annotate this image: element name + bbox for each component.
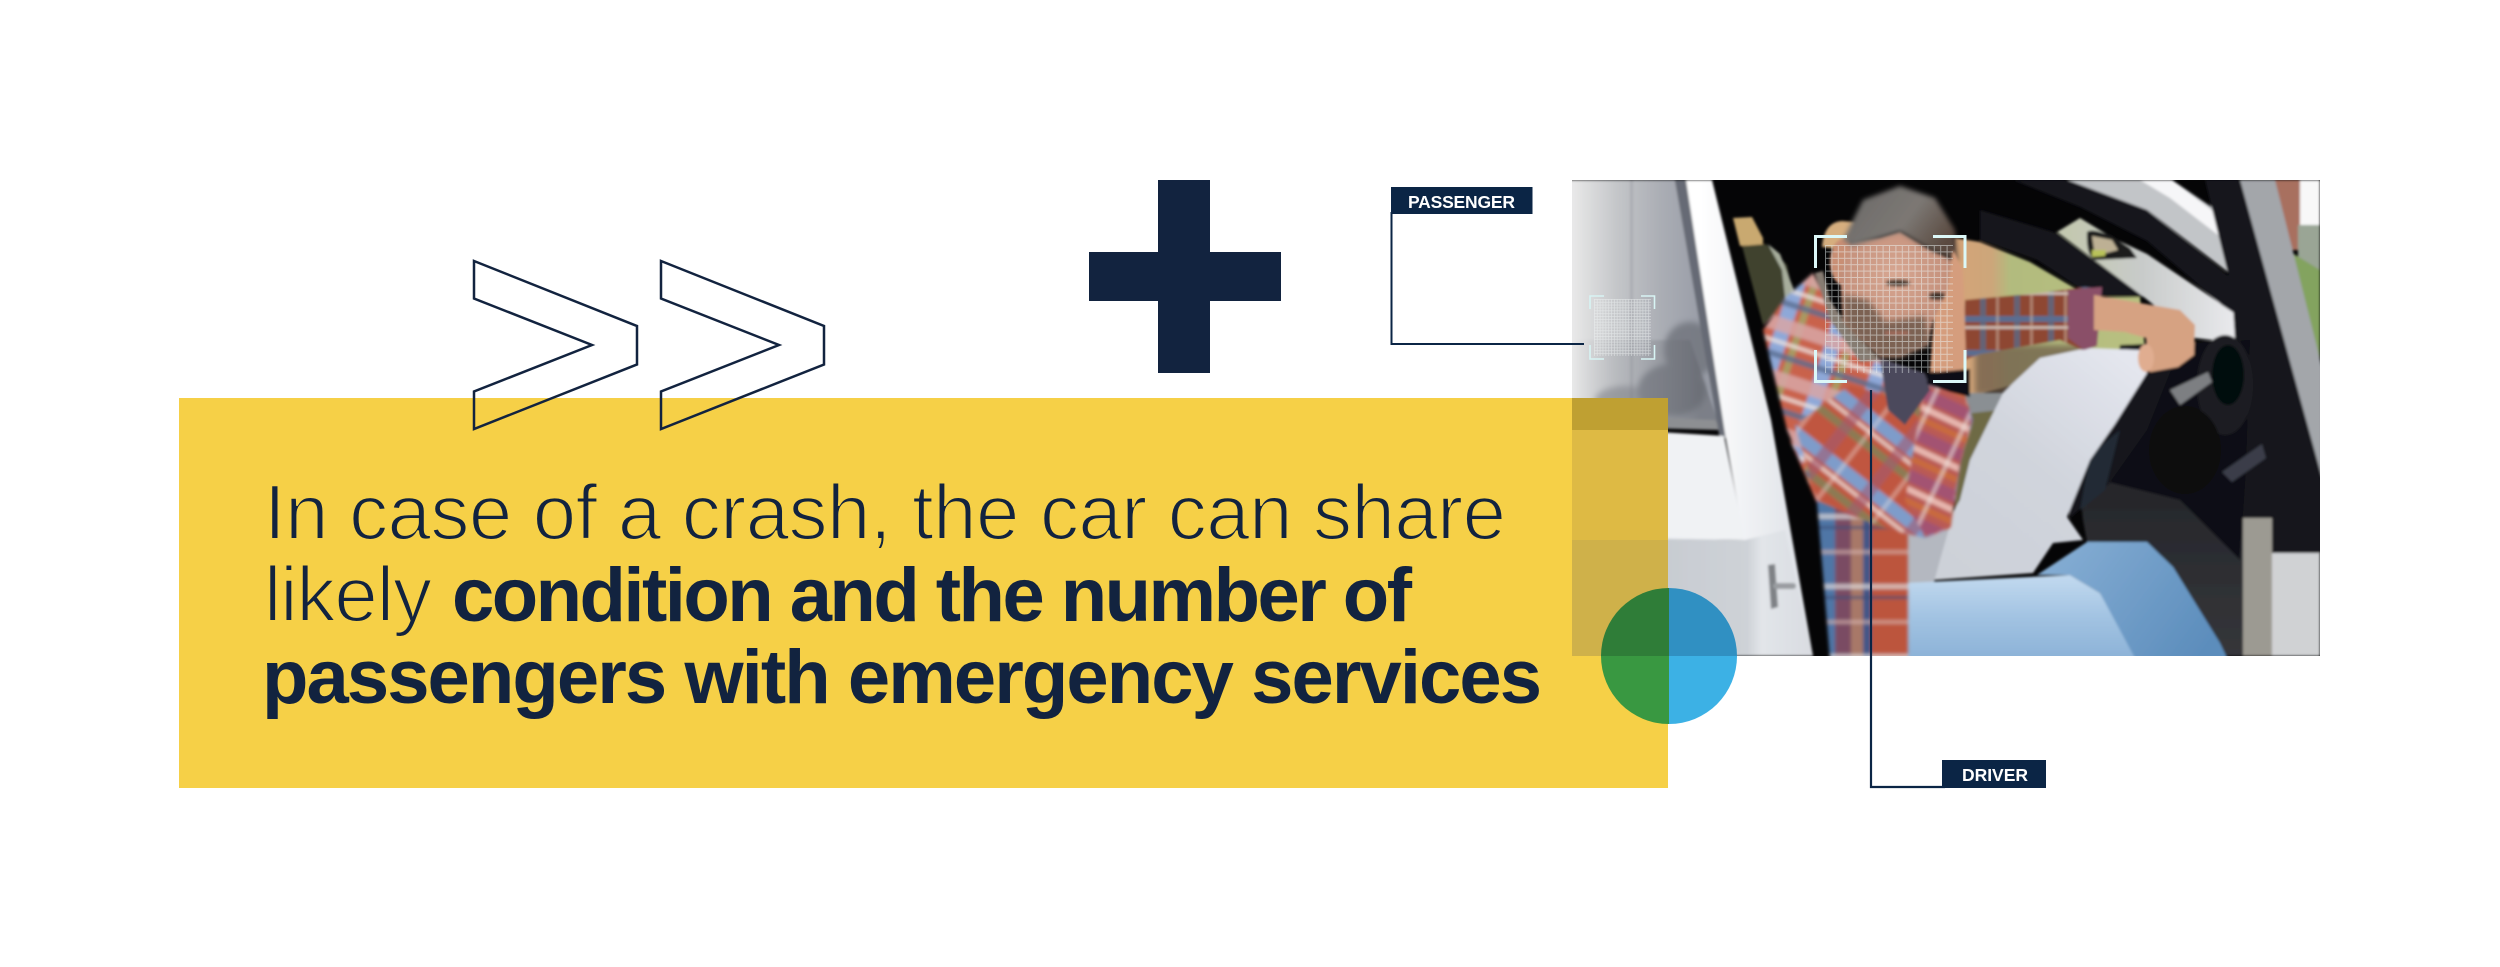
near jeans leg: [1905, 575, 2136, 660]
hair: [1843, 186, 1958, 262]
door pillar: [1686, 180, 1813, 656]
photo: driver in crashed car with deployed airbag: [1560, 180, 2322, 660]
side window view: [1955, 238, 2145, 397]
shirt back sleeve: [1960, 287, 2100, 362]
headline text: condition and the number of: [452, 553, 1413, 638]
shirt torso lower: [1790, 440, 1908, 660]
airbag: [1933, 348, 2147, 580]
undershirt: [1905, 528, 1948, 585]
car window glass: [1560, 180, 1722, 430]
icon: double chevron outline: [474, 261, 824, 429]
collar: [1815, 271, 1880, 362]
roof trim: [2066, 180, 2230, 274]
door handle: [1768, 564, 1796, 609]
door frame pillar right: [2240, 180, 2322, 478]
face scan: passenger: [1590, 296, 1654, 359]
yellow text panel: [179, 398, 1668, 788]
circle: green and blue quadrants: [1601, 588, 1737, 724]
label: passenger: [1391, 187, 1532, 214]
door body: [1668, 430, 1746, 588]
connector: driver: [1871, 390, 1945, 787]
headline text: passengers with emergency services: [262, 635, 1542, 720]
face scan: driver: [1816, 236, 1965, 382]
rear view mirror: [2087, 231, 2137, 260]
icon: plus sign: [1089, 180, 1281, 373]
headline text: In case of a crash, the car can share: [264, 468, 1506, 556]
window seal: [1675, 180, 1731, 440]
connector: passenger: [1392, 212, 1584, 344]
chest inside shirt: [1880, 358, 1930, 425]
headline text: [262, 468, 1542, 720]
hand on wheel: [2094, 295, 2195, 372]
back seats and headrests: [1733, 217, 1855, 325]
watch: [1927, 369, 1970, 397]
roof pillar: [1980, 210, 2145, 297]
face: [1840, 232, 1957, 357]
label: driver: DRIVER: [1962, 765, 2028, 785]
lower interior: [2080, 480, 2244, 656]
steering wheel: [2068, 371, 2171, 518]
headline text: likely: [264, 550, 432, 638]
shirt body and shoulder: [1763, 273, 1972, 537]
background outside door frame: [2274, 180, 2320, 358]
label: driver: [1942, 760, 2046, 788]
dashboard: [2100, 335, 2266, 560]
far jeans leg: [2037, 542, 2228, 660]
beard and eyes: [1843, 280, 1945, 358]
windshield view: [2057, 218, 2255, 345]
yellow overlap on photo: [1572, 398, 1668, 656]
ear: [1828, 238, 1850, 286]
label: passenger: PASSENGER: [1408, 192, 1515, 212]
shirt arm: [1795, 385, 1972, 538]
hand on head: [1930, 250, 1966, 372]
